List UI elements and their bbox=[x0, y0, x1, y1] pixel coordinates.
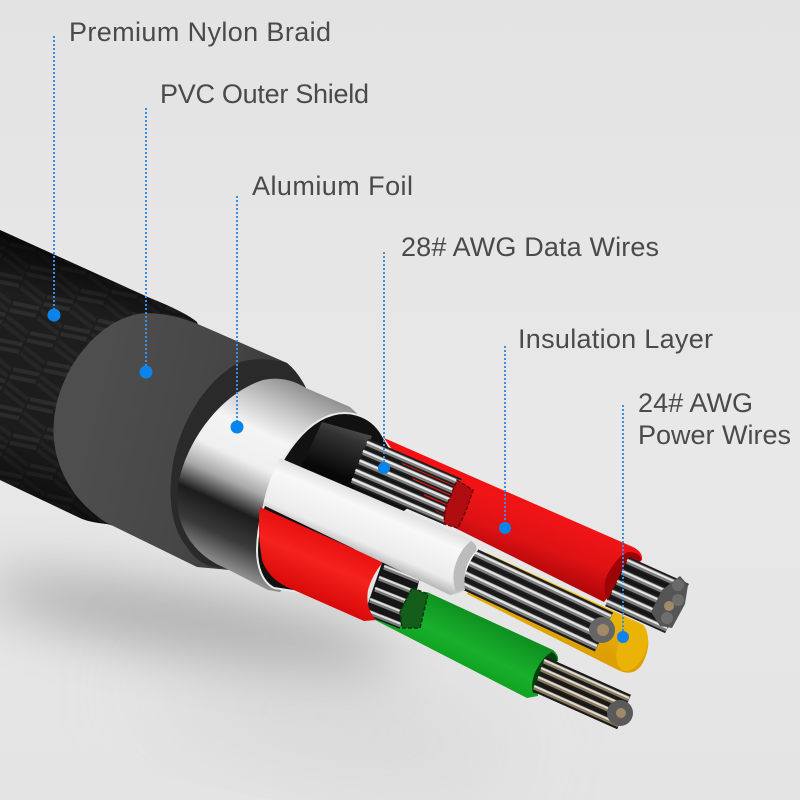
callout: Insulation Layer bbox=[499, 324, 713, 534]
callout: PVC Outer Shield: PVC Outer Shield bbox=[160, 79, 369, 109]
frayed red end bbox=[444, 480, 473, 528]
callout: 28# AWG Data Wires: 28# AWG Data Wires bbox=[401, 232, 659, 262]
callout: Insulation Layer: Insulation Layer bbox=[518, 324, 713, 354]
callout: Premium Nylon Braid: Premium Nylon Braid bbox=[69, 17, 331, 47]
wire: white insulation bbox=[263, 458, 478, 595]
cable: nylon braid jacket bbox=[0, 230, 225, 530]
lower red wire strands bbox=[365, 560, 420, 626]
callout: Alumium Foil bbox=[230, 171, 413, 434]
wire: green insulation with strands bbox=[365, 560, 633, 728]
strand cluster end bbox=[589, 617, 615, 643]
wire: lower red insulation bbox=[259, 507, 383, 621]
callout: Alumium Foil: Alumium Foil bbox=[252, 171, 413, 201]
cable drop shadow bbox=[0, 558, 522, 789]
wire: red insulation with strands bbox=[352, 438, 688, 629]
strand cluster end bbox=[607, 700, 633, 726]
strand cluster end bbox=[651, 576, 688, 628]
callout: 28# AWG Data Wires bbox=[378, 232, 659, 474]
wire: white insulation with strands bbox=[459, 552, 615, 647]
callout: 24# AWG Power Wires bbox=[617, 388, 791, 643]
callout: Premium Nylon Braid bbox=[48, 17, 331, 322]
wire: black data wire with strands bbox=[300, 422, 460, 522]
cable: aluminium foil bbox=[177, 379, 420, 592]
callout: 24# AWG Power Wires: 24# AWG bbox=[638, 388, 753, 418]
callout: PVC Outer Shield bbox=[140, 79, 369, 378]
frayed green end bbox=[400, 588, 428, 628]
callout: 24# AWG Power Wires: Power Wires bbox=[638, 420, 791, 450]
wire: yellow power wire bbox=[467, 553, 654, 675]
cable: PVC outer shield bbox=[53, 313, 306, 570]
